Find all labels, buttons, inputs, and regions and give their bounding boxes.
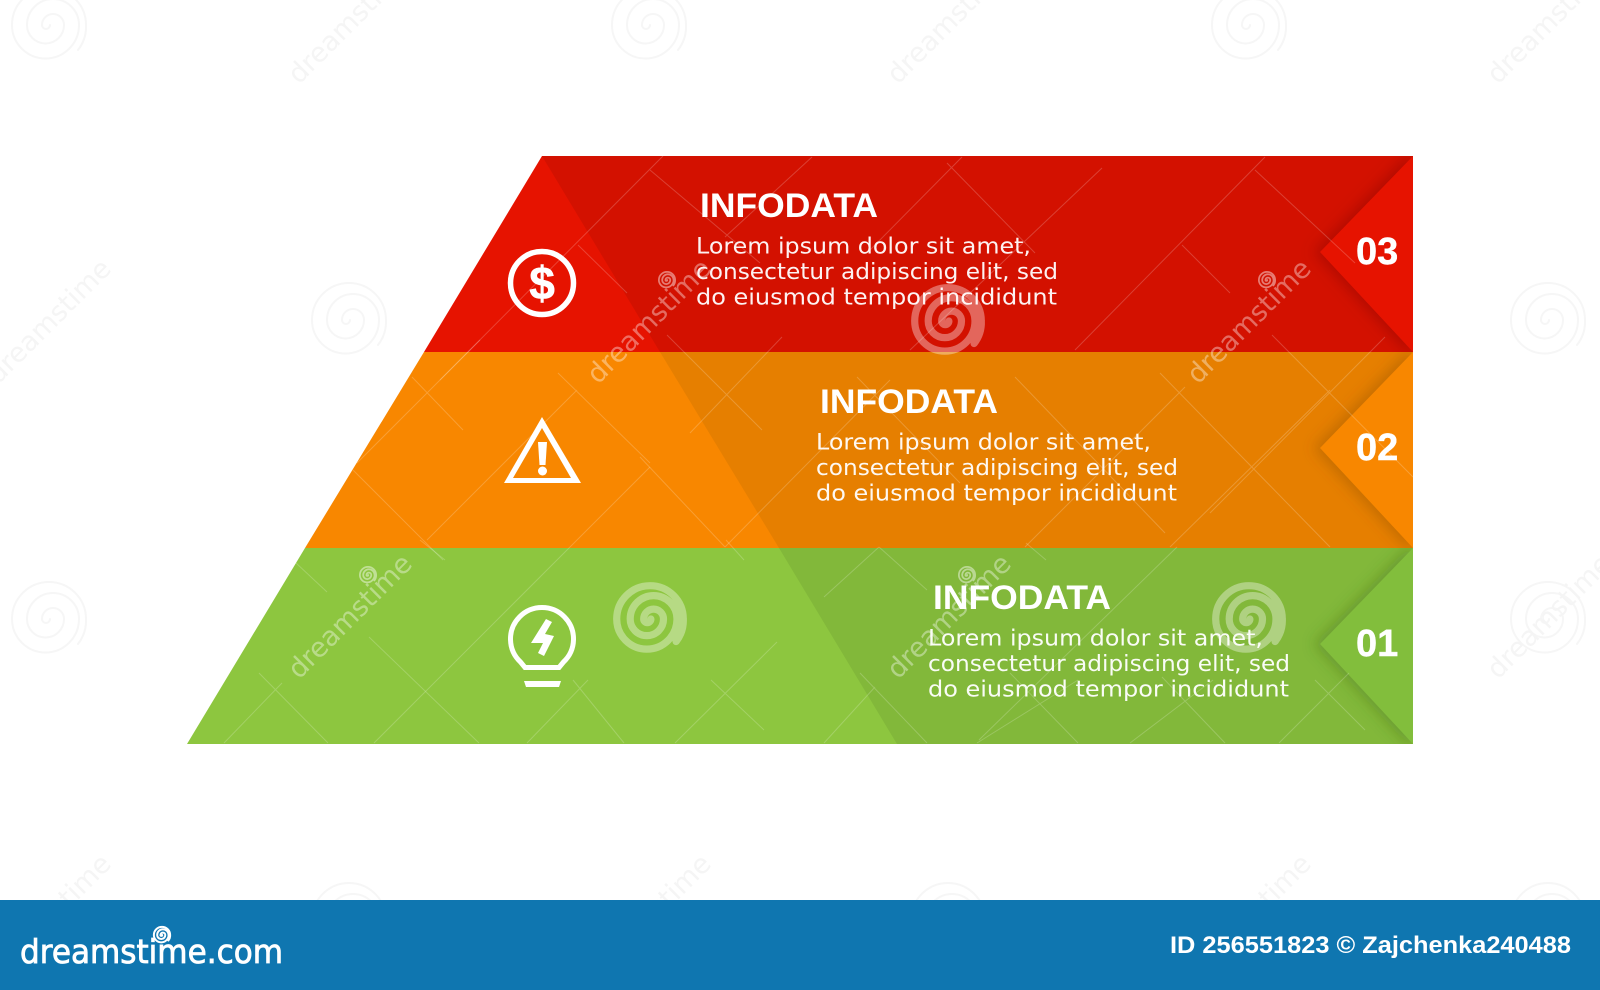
watermark: dreamstime marks on colour xyxy=(282,253,1318,685)
watermark: dreamstime marks on colour: dreamstime xyxy=(881,548,1018,685)
text block: tier 01: do eiusmod tempor incididunt xyxy=(928,678,1289,702)
watermark: dreamstime marks on colour: dreamstime xyxy=(1181,253,1318,390)
text block: tier 03 xyxy=(696,187,1058,310)
footer credit: ID 256551823 © Zajchenka240488 xyxy=(1170,932,1571,959)
text block: tier 01: Lorem ipsum dolor sit amet, xyxy=(928,626,1263,652)
text block: tier 01: consectetur adipiscing elit, sed xyxy=(928,652,1290,677)
text block: tier 03: do eiusmod tempor incididunt xyxy=(696,286,1057,310)
faint watermark layer on white: dreamstime xyxy=(1181,848,1318,985)
text block: tier 03: Lorem ipsum dolor sit amet, xyxy=(696,234,1031,260)
number 01: 01 xyxy=(1356,623,1398,665)
text block: tier 02: INFODATA xyxy=(820,383,998,421)
text block: tier 01: INFODATA xyxy=(933,579,1111,617)
number 02: 02 xyxy=(1356,427,1398,469)
faint watermark layer on white: dreamstime xyxy=(581,848,718,985)
text block: tier 01 xyxy=(928,579,1290,702)
panel: green tier 01 xyxy=(187,542,1413,750)
text block: tier 02 xyxy=(816,383,1178,506)
icon: warning triangle xyxy=(504,417,581,483)
footer bar xyxy=(0,900,1600,990)
icon: dollar coin xyxy=(510,252,574,314)
panel: orange tier 02 xyxy=(305,346,1413,554)
watermark: dreamstime marks on colour: dreamstime xyxy=(581,253,718,390)
text block: tier 03: consectetur adipiscing elit, sed xyxy=(696,260,1058,285)
text block: tier 03: INFODATA xyxy=(700,187,878,225)
icon: light bulb with bolt xyxy=(510,607,574,687)
footer logo: dreamstime.com xyxy=(20,932,283,971)
number 03: 03 xyxy=(1356,231,1398,273)
text block: tier 02: do eiusmod tempor incididunt xyxy=(816,482,1177,506)
icon: dollar coin: $ xyxy=(529,257,555,309)
text block: tier 02: Lorem ipsum dolor sit amet, xyxy=(816,430,1151,456)
watermark lattice lines xyxy=(224,156,1413,743)
text block: tier 02: consectetur adipiscing elit, sed xyxy=(816,456,1178,481)
panel: red tier 03 xyxy=(424,150,1413,358)
watermark: dreamstime marks on colour: dreamstime xyxy=(282,548,419,685)
